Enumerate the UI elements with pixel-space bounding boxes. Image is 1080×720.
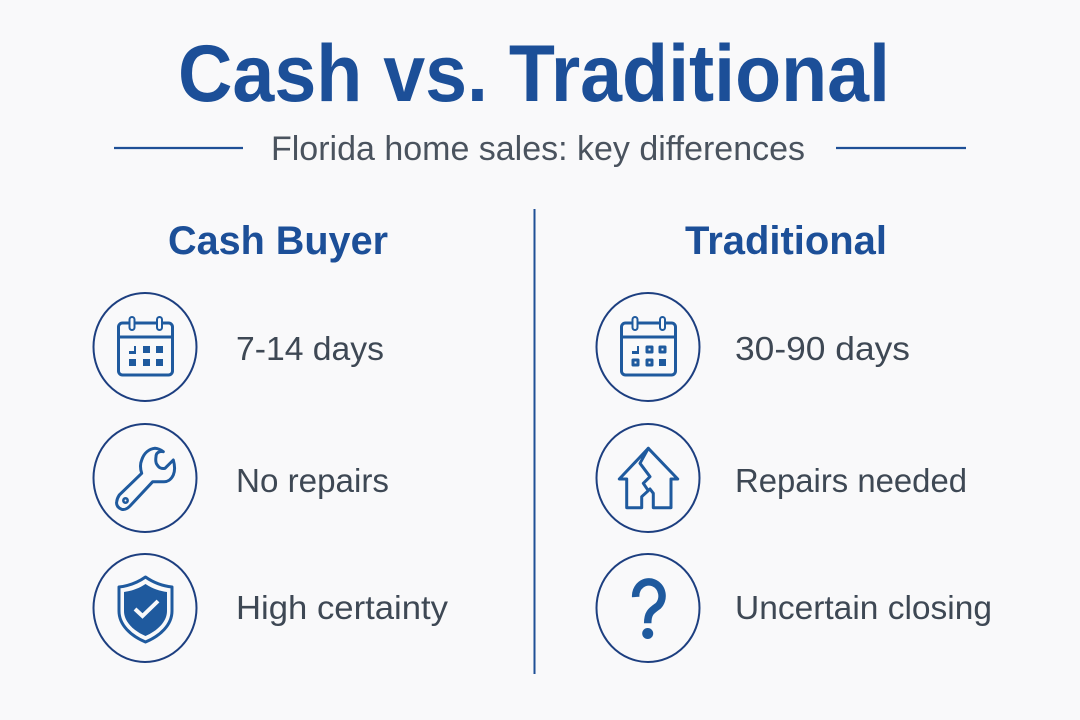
label: high certainty: High certainty <box>236 589 449 626</box>
label: no repairs: No repairs <box>236 462 389 499</box>
row: uncertain closing <box>596 554 992 662</box>
row: 30-90 days <box>596 293 910 401</box>
title: Cash vs. Traditional <box>178 29 890 119</box>
icon: question mark <box>636 582 662 639</box>
label: repairs needed: Repairs needed <box>735 462 967 499</box>
label: uncertain closing: Uncertain closing <box>735 589 992 626</box>
icon: cracked house <box>619 448 678 508</box>
subtitle with side rules: Florida home sales: key differences <box>271 130 805 168</box>
row: 7-14 days <box>94 293 384 401</box>
icon: calendar <box>622 317 676 375</box>
heading: traditional: Traditional <box>685 219 887 263</box>
row: repairs needed <box>596 424 967 532</box>
heading: cash buyer: Cash Buyer <box>168 219 388 263</box>
icon: calendar <box>118 317 172 375</box>
icon: wrench <box>117 448 175 510</box>
panel: cash buyer <box>94 219 449 662</box>
icon: shield <box>119 577 172 642</box>
row: no repairs <box>94 424 389 532</box>
panel: traditional <box>596 219 992 662</box>
row: high certainty <box>94 554 449 662</box>
label: 7-14 days: 7-14 days <box>236 330 384 367</box>
label: 30-90 days: 30-90 days <box>735 330 910 367</box>
